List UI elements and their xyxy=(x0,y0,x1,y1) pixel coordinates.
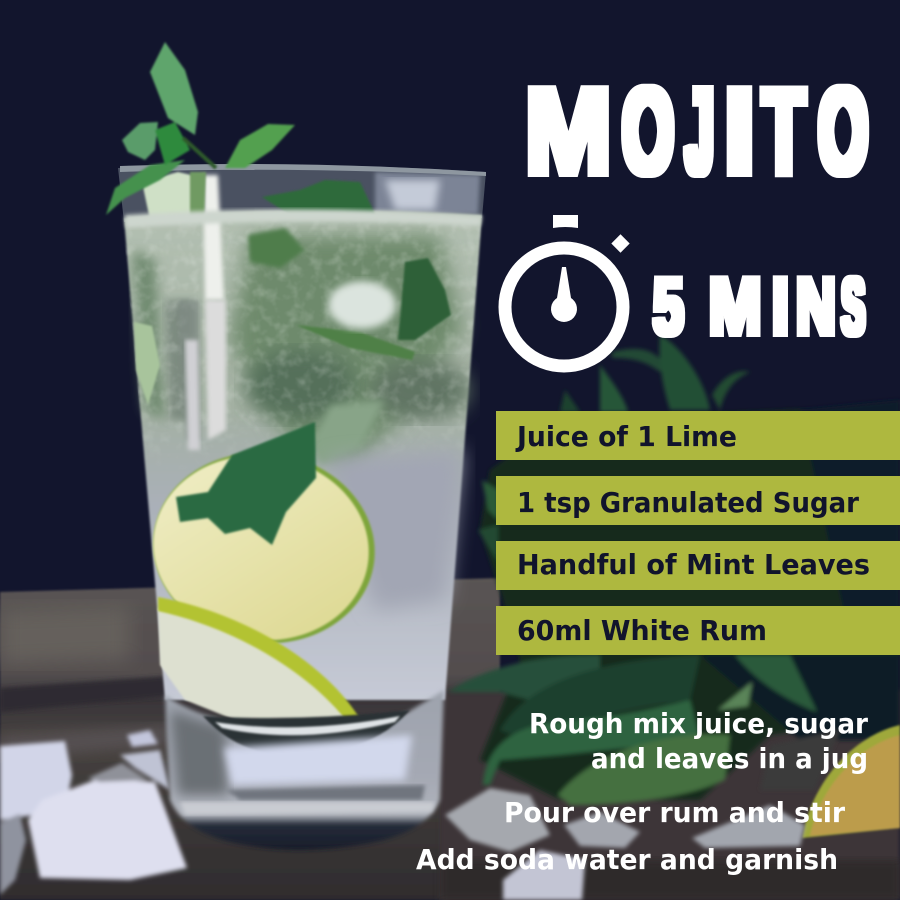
glass upper, empty part xyxy=(118,165,486,222)
time label: M xyxy=(708,262,762,352)
glass xyxy=(118,164,486,850)
ingredient: mint xyxy=(496,541,900,590)
ingredient: lime juice xyxy=(496,411,900,460)
lower lime wedge xyxy=(158,608,352,728)
glass foot xyxy=(165,690,444,850)
instructions: and leaves in a jug xyxy=(591,742,868,775)
instructions xyxy=(416,707,868,876)
mint bunch behind xyxy=(448,335,900,805)
mint on lime xyxy=(176,422,316,545)
lime wedge right xyxy=(802,725,900,838)
instructions: Rough mix juice, sugar xyxy=(529,707,868,740)
ingredient: sugar xyxy=(496,476,900,525)
lime slice xyxy=(141,438,387,658)
time label: 5 xyxy=(653,260,684,352)
title: M xyxy=(525,63,612,200)
instructions: Add soda water and garnish xyxy=(416,843,838,876)
inner green mottling xyxy=(230,235,462,465)
time label xyxy=(653,260,865,352)
icon: stopwatch xyxy=(505,215,630,366)
mint garnish xyxy=(106,42,295,215)
title: J xyxy=(686,63,713,199)
ice cubes xyxy=(0,730,805,900)
title: O xyxy=(622,62,674,199)
title: O xyxy=(818,63,868,199)
ingredient: mint: Handful of Mint Leaves xyxy=(517,548,870,581)
ingredient: lime juice: Juice of 1 Lime xyxy=(515,420,737,453)
ingredient: rum: 60ml White Rum xyxy=(517,614,767,647)
liquid xyxy=(124,211,482,700)
time label: N xyxy=(796,260,836,352)
instructions: Pour over rum and stir xyxy=(504,796,845,829)
title: T xyxy=(763,64,805,200)
title: I xyxy=(722,63,756,199)
lower liquid right shade xyxy=(330,450,462,610)
time label: S xyxy=(842,263,865,352)
time label: I xyxy=(772,262,789,352)
ingredient: rum xyxy=(496,606,900,655)
title xyxy=(525,62,868,200)
ingredient: sugar: 1 tsp Granulated Sugar xyxy=(517,486,859,519)
highlights xyxy=(203,175,224,300)
